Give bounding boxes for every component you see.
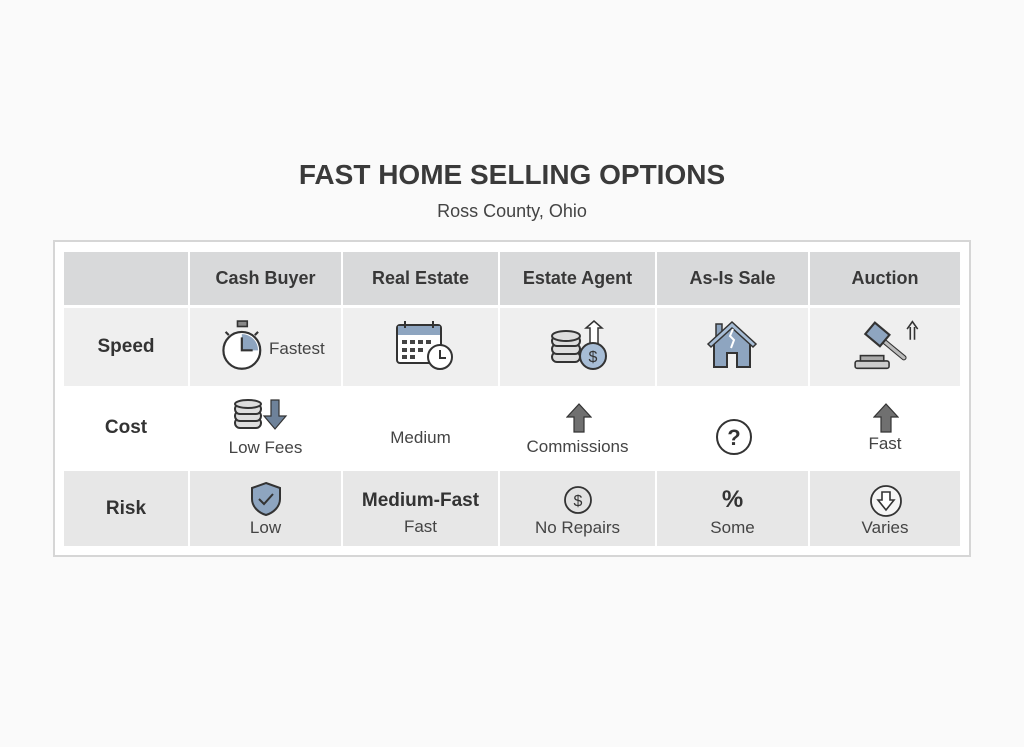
icon: up arrow — [566, 403, 592, 433]
icon: coins dollar up: $ — [589, 349, 598, 366]
row: speed: Speed — [97, 336, 155, 357]
header row: Auction — [852, 268, 918, 288]
icon: calendar clock — [396, 321, 453, 370]
row: risk: Low — [250, 518, 281, 537]
subtitle: Ross County, Ohio — [437, 201, 587, 221]
icon: coins down — [234, 399, 288, 430]
row: risk: No Repairs — [535, 518, 620, 537]
row: risk: Some — [710, 518, 755, 537]
row: cost: Commissions — [526, 437, 629, 456]
table panel — [53, 240, 971, 557]
row: risk: Fast — [404, 517, 437, 536]
row: risk: Varies — [862, 518, 908, 537]
icon: question: ? — [727, 425, 741, 450]
header row: As-Is Sale — [689, 268, 776, 288]
icon: dollar circle: $ — [574, 493, 583, 510]
row: risk: Risk — [106, 498, 146, 518]
icon: up arrow auction — [873, 403, 899, 433]
icon: coins dollar up — [551, 320, 607, 370]
icon: shield — [251, 482, 281, 516]
row: cost: Low Fees — [229, 438, 302, 457]
header row: Real Estate — [372, 268, 469, 288]
row: risk: Medium-Fast — [362, 490, 479, 511]
header row: Estate Agent — [523, 268, 632, 288]
icon: gavel — [854, 320, 918, 370]
row: cost: Medium — [390, 428, 451, 447]
icon: question — [716, 419, 752, 455]
title: FAST HOME SELLING OPTIONS — [299, 159, 725, 190]
icon: down circle — [870, 485, 902, 517]
row: cost: Cost — [105, 417, 147, 438]
icon: dollar circle — [564, 486, 592, 514]
header row: Cash Buyer — [215, 268, 316, 288]
icon: stopwatch — [222, 320, 262, 370]
row: risk: % — [722, 486, 743, 513]
row: cost: Fast — [868, 434, 902, 453]
icon: cracked house — [707, 321, 757, 368]
row: speed: Fastest — [269, 339, 325, 358]
